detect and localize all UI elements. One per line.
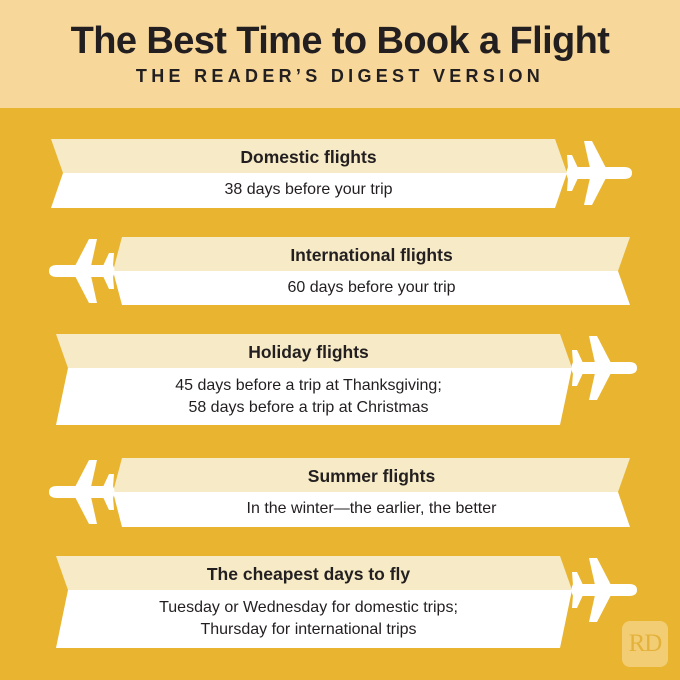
icon: plane right (566, 141, 632, 205)
text: 60 days before your trip (287, 279, 456, 296)
logo: RD: RD (629, 630, 661, 657)
title: The Best Time to Book a Flight (71, 20, 609, 62)
header band (0, 0, 680, 108)
banner text: cheapest: The cheapest days to fly (207, 564, 410, 584)
banner text: summer: Summer flights (308, 466, 435, 486)
banner: domestic (51, 139, 632, 208)
text: 58 days before a trip at Christmas (188, 399, 429, 416)
icon: plane left (49, 239, 114, 303)
logo: RD (622, 621, 668, 667)
banner text: domestic: Domestic flights (240, 147, 377, 167)
banner text: international: International flights (290, 245, 453, 265)
banner: international (49, 237, 630, 305)
banner: summer (49, 458, 630, 527)
icon: plane right (572, 558, 637, 622)
text: In the winter—the earlier, the better (247, 500, 496, 517)
icon: plane left (49, 460, 114, 524)
banner: holiday (56, 334, 637, 425)
icon: plane right (572, 336, 637, 400)
text: 38 days before your trip (224, 181, 393, 198)
subtitle: THE READER’S DIGEST VERSION (136, 66, 544, 86)
text: Tuesday or Wednesday for domestic trips; (159, 599, 458, 616)
text: Thursday for international trips (200, 621, 417, 638)
banner: cheapest (56, 556, 637, 648)
text: 45 days before a trip at Thanksgiving; (175, 377, 442, 394)
banner text: holiday: Holiday flights (248, 342, 369, 362)
